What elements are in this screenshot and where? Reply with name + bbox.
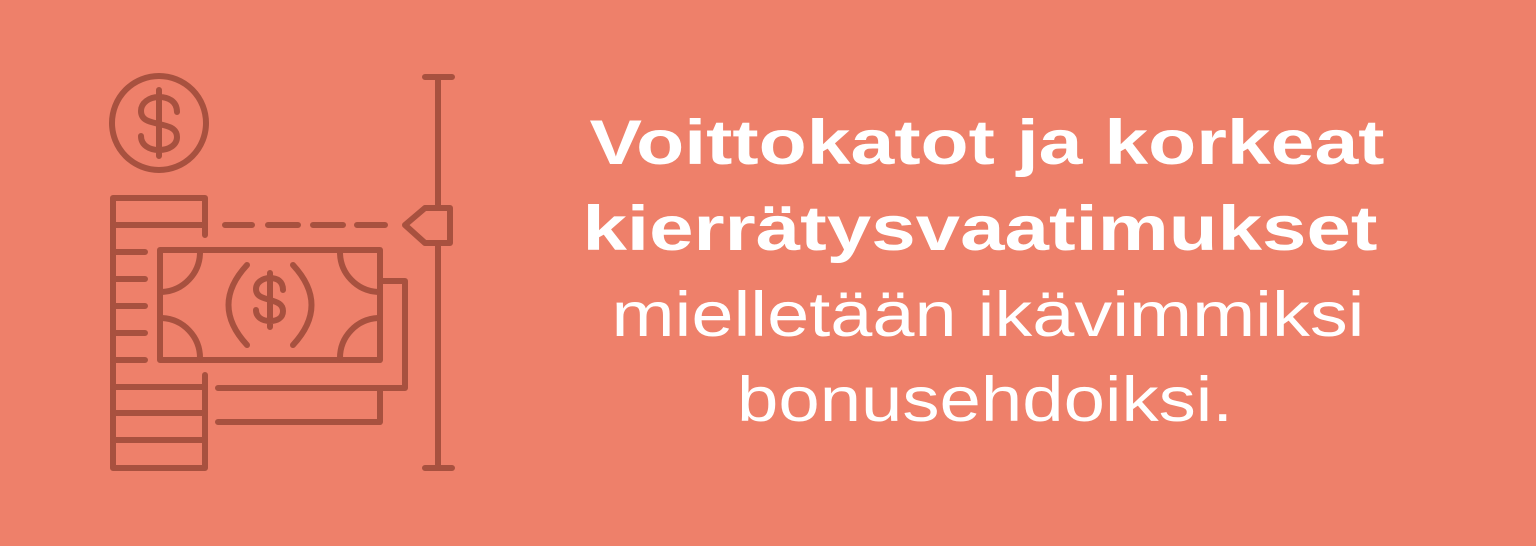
icon: coin — [112, 76, 206, 170]
icon: money with measure — [112, 76, 452, 468]
icon: dashed level line — [225, 222, 385, 228]
icon: bill — [160, 250, 405, 422]
heading line 2: kierrätysvaatimukset — [582, 194, 1378, 264]
icon: measure bar — [405, 77, 452, 468]
text block — [582, 108, 1385, 435]
icon: coin stack — [113, 198, 205, 468]
body line 3: mielletään ikävimmiksi — [612, 280, 1364, 350]
body line 4: bonusehdoiksi. — [737, 365, 1233, 435]
heading line 1: Voittokatot ja korkeat — [590, 108, 1385, 178]
